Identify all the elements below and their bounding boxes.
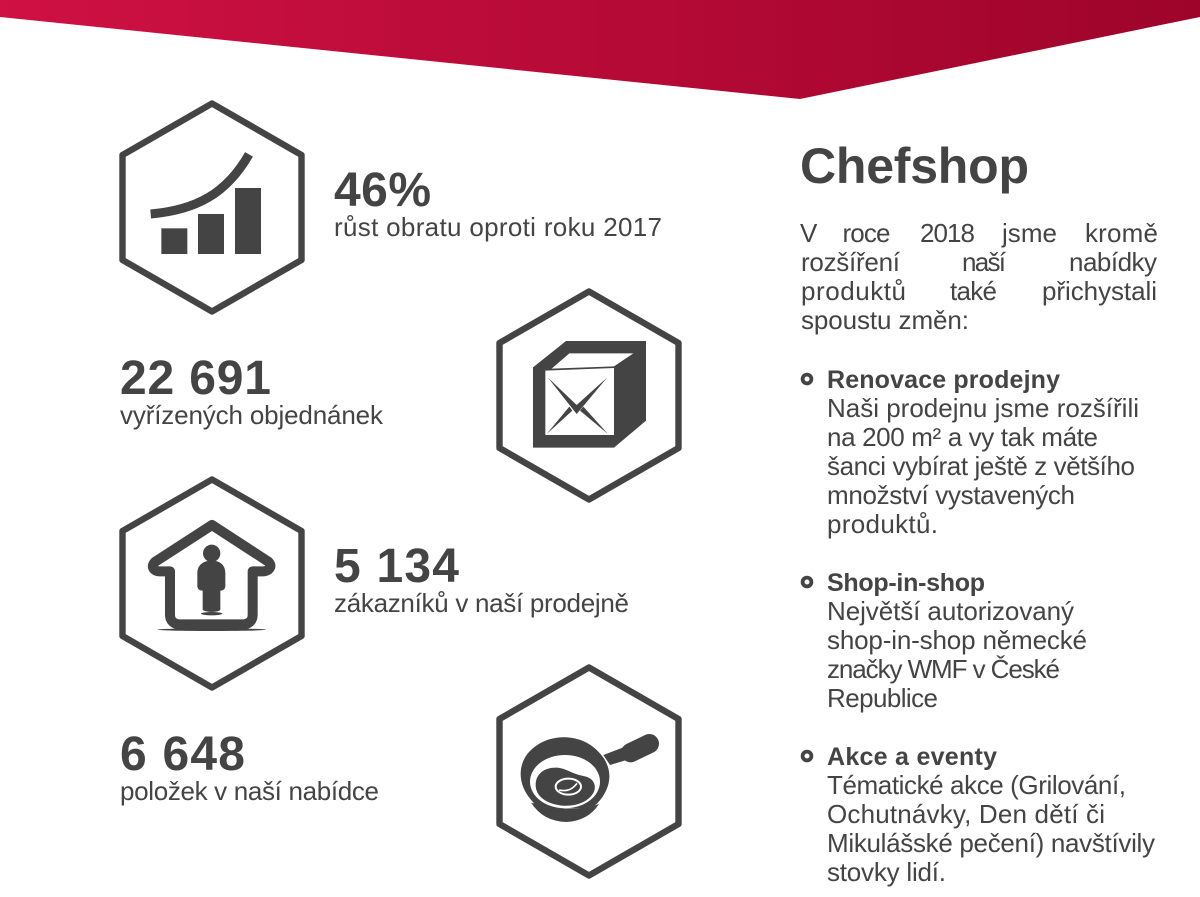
item text: šanci vybírat ještě z většího [827, 451, 1135, 481]
item text: shop-in-shop německé [827, 625, 1087, 655]
item text: na 200 m² a vy tak máte [827, 422, 1098, 452]
item text [827, 596, 1087, 713]
intro paragraph: spoustu změn: [801, 305, 969, 335]
label: customers: zákazníků v naší prodejně [334, 588, 629, 618]
intro paragraph: jsme [1001, 218, 1057, 248]
label: orders: vyřízených objednánek [120, 400, 384, 430]
intro paragraph: kromě [1085, 218, 1158, 248]
item text: stovky lidí. [827, 857, 946, 887]
label: revenue growth: růst obratu oproti roku 2017 [334, 212, 662, 242]
icon: parcel box in hexagon [500, 292, 678, 500]
list item: Shop-in-shop [803, 569, 1087, 713]
list item: Renovace prodejny [803, 366, 1139, 539]
intro paragraph: nabídky [1069, 247, 1157, 277]
item text: množství vystavených [827, 480, 1075, 510]
item text: Ochutnávky, Den dětí či [827, 799, 1105, 829]
item text: Největší autorizovaný [827, 596, 1074, 626]
item text [827, 393, 1139, 539]
heading: Chefshop: Chefshop [800, 138, 1029, 194]
intro paragraph: naší [962, 247, 1007, 277]
item text: značky WMF v České [827, 654, 1060, 684]
intro paragraph: přichystali [1042, 276, 1157, 306]
intro paragraph: roce [842, 218, 890, 248]
value: 22 691: 22 691 [120, 352, 271, 405]
bullet [803, 578, 811, 586]
intro paragraph [800, 218, 1158, 335]
icon: person in house in hexagon [122, 480, 302, 688]
intro paragraph: také [950, 276, 997, 306]
intro paragraph: 2018 [920, 218, 975, 248]
item title: Shop-in-shop [827, 569, 985, 597]
icon: growth chart in hexagon [122, 104, 302, 312]
item title: Akce a eventy [827, 743, 997, 771]
item text: Tématické akce (Grilování, [827, 770, 1126, 800]
intro paragraph: rozšíření [801, 247, 901, 277]
item title: Renovace prodejny [827, 366, 1060, 394]
icon: frying pan in hexagon [500, 668, 678, 876]
bullet [803, 752, 811, 760]
bullet [803, 375, 811, 383]
item text: produktů. [827, 509, 938, 539]
item text: Naši prodejnu jsme rozšířili [827, 393, 1139, 423]
stat: orders [120, 292, 678, 500]
stat: customers [122, 480, 629, 688]
label: products: položek v naší nabídce [120, 776, 379, 806]
intro paragraph: produktů [801, 276, 906, 306]
top banner [0, 0, 1200, 99]
item text: Mikulášské pečení) navštívily [827, 828, 1155, 858]
item text: Republice [827, 683, 938, 713]
item text [827, 770, 1155, 887]
stat: products [120, 668, 678, 876]
value: 6 648: 6 648 [120, 728, 245, 781]
stat: revenue growth [122, 104, 662, 312]
list item: Akce a eventy [803, 743, 1155, 887]
value: 46%: 46% [334, 164, 431, 217]
value: 5 134: 5 134 [334, 540, 459, 593]
intro paragraph: V [800, 218, 818, 248]
